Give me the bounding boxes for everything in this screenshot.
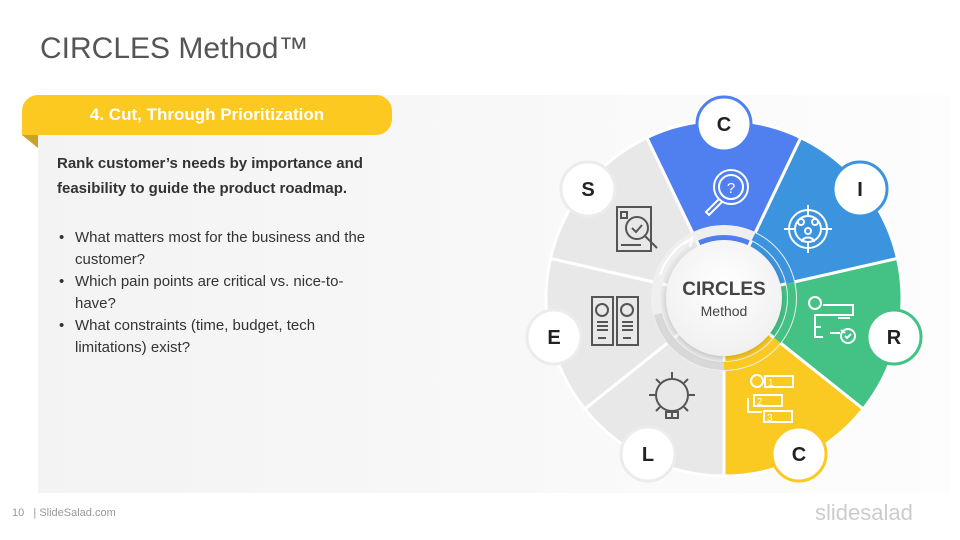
icon: ranked list: 1 [768, 378, 774, 389]
bullet list: What matters most for the business and the customer? [75, 229, 365, 268]
header text [22, 95, 392, 135]
icon: target people [784, 205, 832, 253]
description: Rank customer’s needs by importance and feasibility to guide the product roadmap. [57, 155, 363, 197]
segment E [546, 258, 724, 409]
background panel [38, 95, 950, 493]
segment L [585, 298, 724, 476]
segment S [550, 138, 724, 298]
icon: compare documents [592, 297, 638, 345]
letter C bottom [772, 427, 826, 481]
icon: ranked list: 3 [767, 413, 773, 424]
segment C bottom [724, 298, 863, 476]
letter I: I [857, 179, 863, 201]
segment I [724, 138, 898, 298]
letter C bottom: C [792, 444, 806, 466]
bullet list: • [59, 273, 64, 290]
bullet list [59, 229, 365, 356]
letter R: R [887, 327, 902, 349]
segment R [724, 258, 902, 409]
center circle [666, 240, 782, 356]
footer page number: 10 | SlideSalad.com [12, 507, 116, 519]
icon: magnifier question: ? [727, 180, 735, 197]
letter L: L [642, 444, 654, 466]
fold [22, 135, 38, 148]
icon: process flow [809, 297, 855, 343]
footer logo: slidesalad [815, 500, 913, 525]
bullet list: • [59, 229, 64, 246]
letter R [867, 310, 921, 364]
letter S: S [581, 179, 595, 201]
bullet list: Which pain points are critical vs. nice-to-have? [75, 273, 343, 312]
center circle: CIRCLES [682, 279, 766, 300]
bullet list: What constraints (time, budget, tech limitations) exist? [75, 317, 315, 356]
inner ring [656, 230, 792, 366]
letter I [833, 162, 887, 216]
icon: ranked list [748, 375, 793, 424]
header text: 4. Cut, Through Prioritization [90, 105, 324, 124]
letter C top: C [717, 114, 731, 136]
letter C top [697, 97, 751, 151]
letter E [527, 310, 581, 364]
letter S [561, 162, 615, 216]
header bar: step 4 [22, 95, 392, 148]
icon: ranked list: 2 [757, 397, 763, 408]
icon: gear bulb [649, 372, 695, 418]
segment C top [647, 120, 801, 298]
icon: document check magnifier [617, 207, 657, 251]
letter L [621, 427, 675, 481]
letter circles [527, 97, 921, 481]
icon: magnifier question [706, 170, 748, 215]
title: CIRCLES Method™ [40, 32, 308, 65]
bullet list: • [59, 317, 64, 334]
letter E: E [547, 327, 561, 349]
center circle: Method [701, 303, 747, 319]
